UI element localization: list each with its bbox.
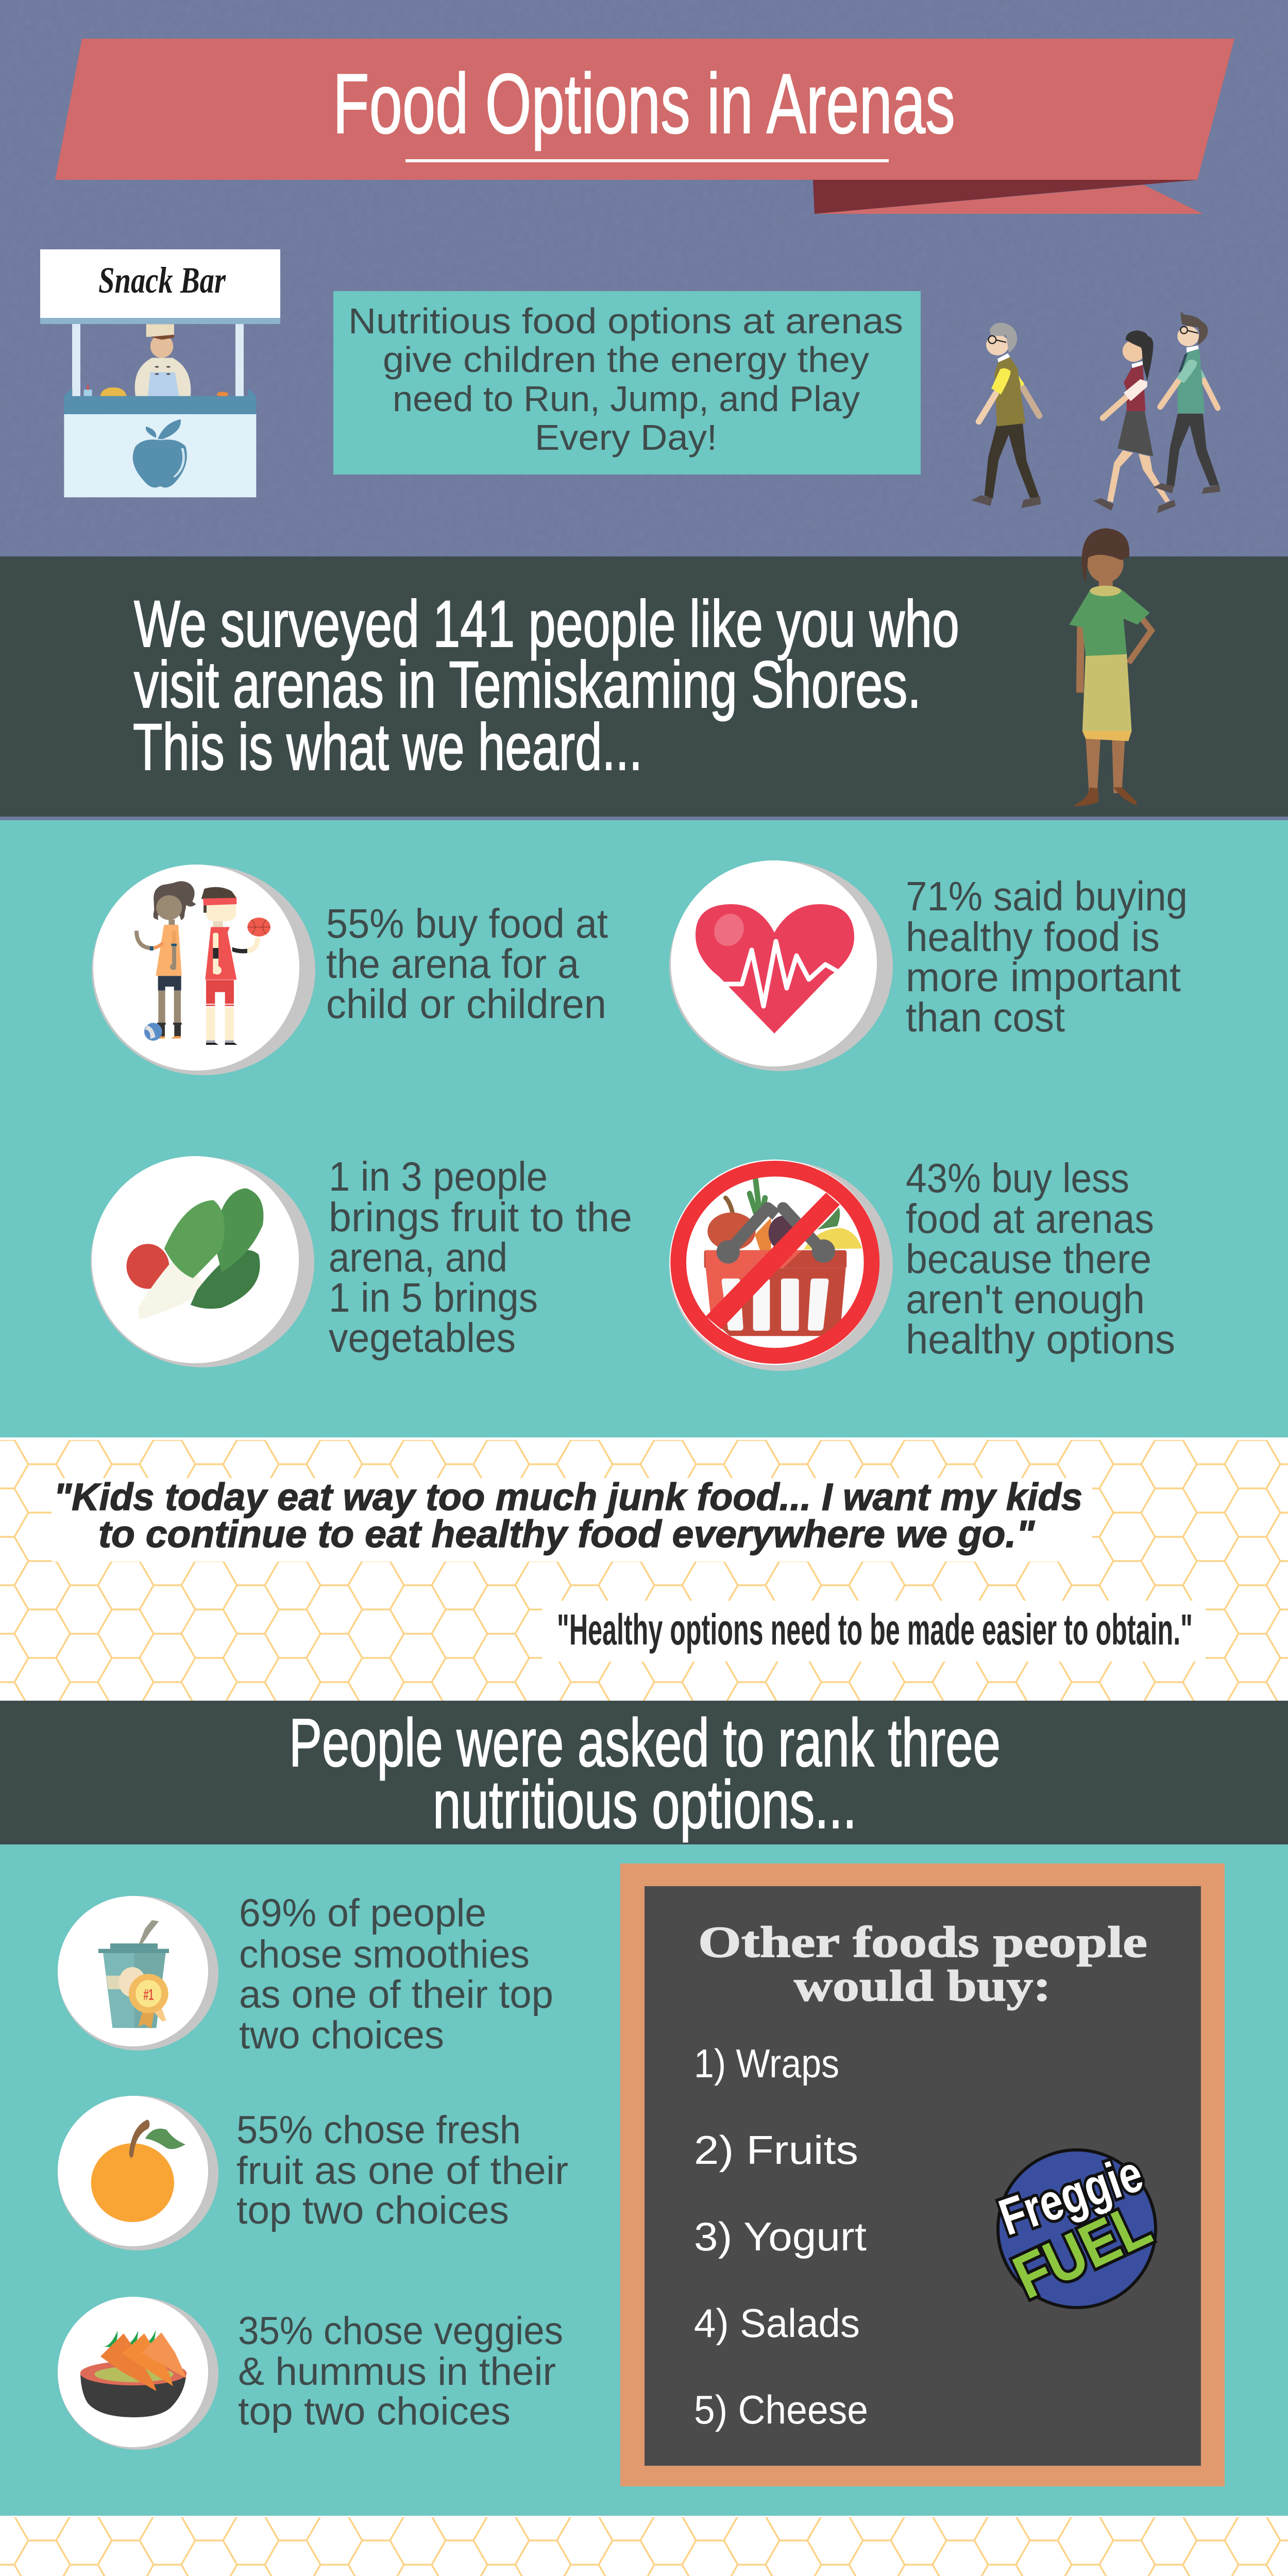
text: 69% smoothies: as one of their top bbox=[239, 1973, 553, 2016]
chalkboard heading: would buy: bbox=[794, 1961, 1051, 2010]
intro text box bbox=[333, 291, 921, 474]
chalkboard list: 3) Yogurt bbox=[694, 2214, 867, 2259]
chalkboard list: 5) Cheese bbox=[694, 2387, 868, 2432]
icon: veggies and hummus bowl bbox=[58, 2297, 218, 2450]
panel: honeycomb quotes 2 bbox=[0, 2516, 1288, 2576]
text: 43% buy less: 43% buy less bbox=[906, 1155, 1129, 1201]
ranking heading band: nutritious options... bbox=[433, 1767, 857, 1842]
text: 55% fresh fruit: fruit as one of their bbox=[236, 2149, 568, 2193]
text: 55% fresh fruit: 55% chose fresh bbox=[236, 2108, 521, 2152]
text: 1 in 3 people: 1 in 5 brings bbox=[329, 1275, 538, 1320]
text: 1 in 3 people bbox=[329, 1154, 632, 1361]
text: 69% smoothies: two choices bbox=[239, 2013, 444, 2057]
quote: kids junk food: to continue to eat healthy food everywhere we go." bbox=[98, 1513, 1035, 1555]
icon: heart with pulse bbox=[669, 860, 893, 1071]
text: 35% veggies: 35% chose veggies bbox=[238, 2309, 563, 2353]
icon: snack bar stand bbox=[40, 249, 280, 497]
text: 1 in 3 people: arena, and bbox=[329, 1234, 507, 1280]
icon: Freggie Fuel logo bbox=[992, 2144, 1161, 2312]
text: 43% buy less: food at arenas bbox=[906, 1196, 1154, 1242]
text: 71% said buying: 71% said buying bbox=[906, 873, 1188, 919]
icon: standing woman bbox=[1069, 528, 1151, 806]
icon: smoothie cup with ribbon bbox=[58, 1896, 218, 2050]
text: 69% smoothies bbox=[239, 1891, 553, 2057]
survey heading band: This is what we heard... bbox=[133, 710, 642, 784]
text: 35% veggies bbox=[238, 2309, 563, 2433]
text: 69% smoothies: chose smoothies bbox=[239, 1933, 530, 1976]
intro text box: need to Run, Jump, and Play bbox=[393, 379, 860, 419]
intro text box: Every Day! bbox=[535, 417, 717, 457]
text: 35% veggies: top two choices bbox=[238, 2389, 511, 2433]
icon: prohibited food basket bbox=[669, 1160, 893, 1371]
ranking heading band bbox=[0, 1701, 1288, 1844]
text: 69% smoothies: 69% of people bbox=[239, 1891, 486, 1935]
survey heading band: We surveyed 141 people like you who bbox=[134, 587, 959, 661]
text: 55% fresh fruit: top two choices bbox=[236, 2189, 509, 2232]
intro text box: Nutritious food options at arenas bbox=[348, 301, 903, 341]
survey heading band: visit arenas in Temiskaming Shores. bbox=[134, 648, 921, 722]
text: 35% veggies: & hummus in their bbox=[238, 2350, 556, 2394]
text: 1 in 3 people: 1 in 3 people bbox=[329, 1154, 548, 1199]
chalkboard list: 1) Wraps bbox=[694, 2041, 839, 2086]
text: 71% said buying: than cost bbox=[906, 994, 1065, 1040]
panel: ranked options bbox=[0, 1844, 1288, 2516]
text: 43% buy less: aren't enough bbox=[906, 1276, 1145, 1322]
title: Food Options in Arenas bbox=[333, 56, 955, 151]
text: 71% said buying: healthy food is bbox=[906, 914, 1160, 960]
text: 1 in 3 people: brings fruit to the bbox=[329, 1194, 632, 1240]
panel: chalkboard other foods bbox=[620, 1863, 1225, 2486]
intro text box: give children the energy they bbox=[383, 340, 869, 380]
chalkboard list bbox=[694, 2041, 868, 2432]
icon: vegetables bbox=[91, 1156, 314, 1367]
text: 43% buy less: because there bbox=[906, 1236, 1151, 1282]
title banner bbox=[55, 39, 1234, 214]
text: 71% said buying: more important bbox=[906, 954, 1181, 1000]
chalkboard heading bbox=[698, 1917, 1147, 2010]
text: 55% buy food: the arena for a bbox=[326, 941, 579, 987]
chalkboard list: 2) Fruits bbox=[694, 2127, 858, 2173]
text: 55% fresh fruit bbox=[236, 2108, 568, 2232]
chalkboard heading: Other foods people bbox=[698, 1917, 1147, 1967]
text: 71% said buying bbox=[906, 873, 1188, 1040]
icon: Freggie Fuel logo: FUEL bbox=[1003, 2190, 1161, 2312]
icon: walking people bbox=[971, 311, 1221, 513]
text: 43% buy less: healthy options bbox=[906, 1316, 1175, 1362]
text: 55% buy food bbox=[326, 901, 608, 1027]
panel: survey results bbox=[0, 820, 1288, 1437]
icon: snack bar stand: Snack Bar bbox=[98, 260, 226, 301]
ranking heading band: People were asked to rank three bbox=[289, 1705, 1001, 1781]
quote: kids junk food: "Kids today eat way too much junk food... I want my kids bbox=[54, 1476, 1082, 1518]
quote: kids junk food bbox=[52, 1476, 1092, 1562]
chalkboard list: 4) Salads bbox=[694, 2300, 860, 2346]
text: 55% buy food: 55% buy food at bbox=[326, 901, 608, 946]
icon: Freggie Fuel logo: Freggie bbox=[992, 2144, 1150, 2247]
text: 43% buy less bbox=[906, 1155, 1175, 1362]
icon: smoothie cup with ribbon: #1 bbox=[143, 1986, 154, 2004]
icon: orange fruit bbox=[58, 2096, 218, 2250]
survey heading band bbox=[0, 556, 1288, 817]
icon: children with ball bbox=[92, 865, 315, 1075]
text: 1 in 3 people: vegetables bbox=[329, 1315, 516, 1361]
text: 55% buy food: child or children bbox=[326, 981, 606, 1027]
panel: honeycomb quotes 1 bbox=[0, 1437, 1288, 1701]
